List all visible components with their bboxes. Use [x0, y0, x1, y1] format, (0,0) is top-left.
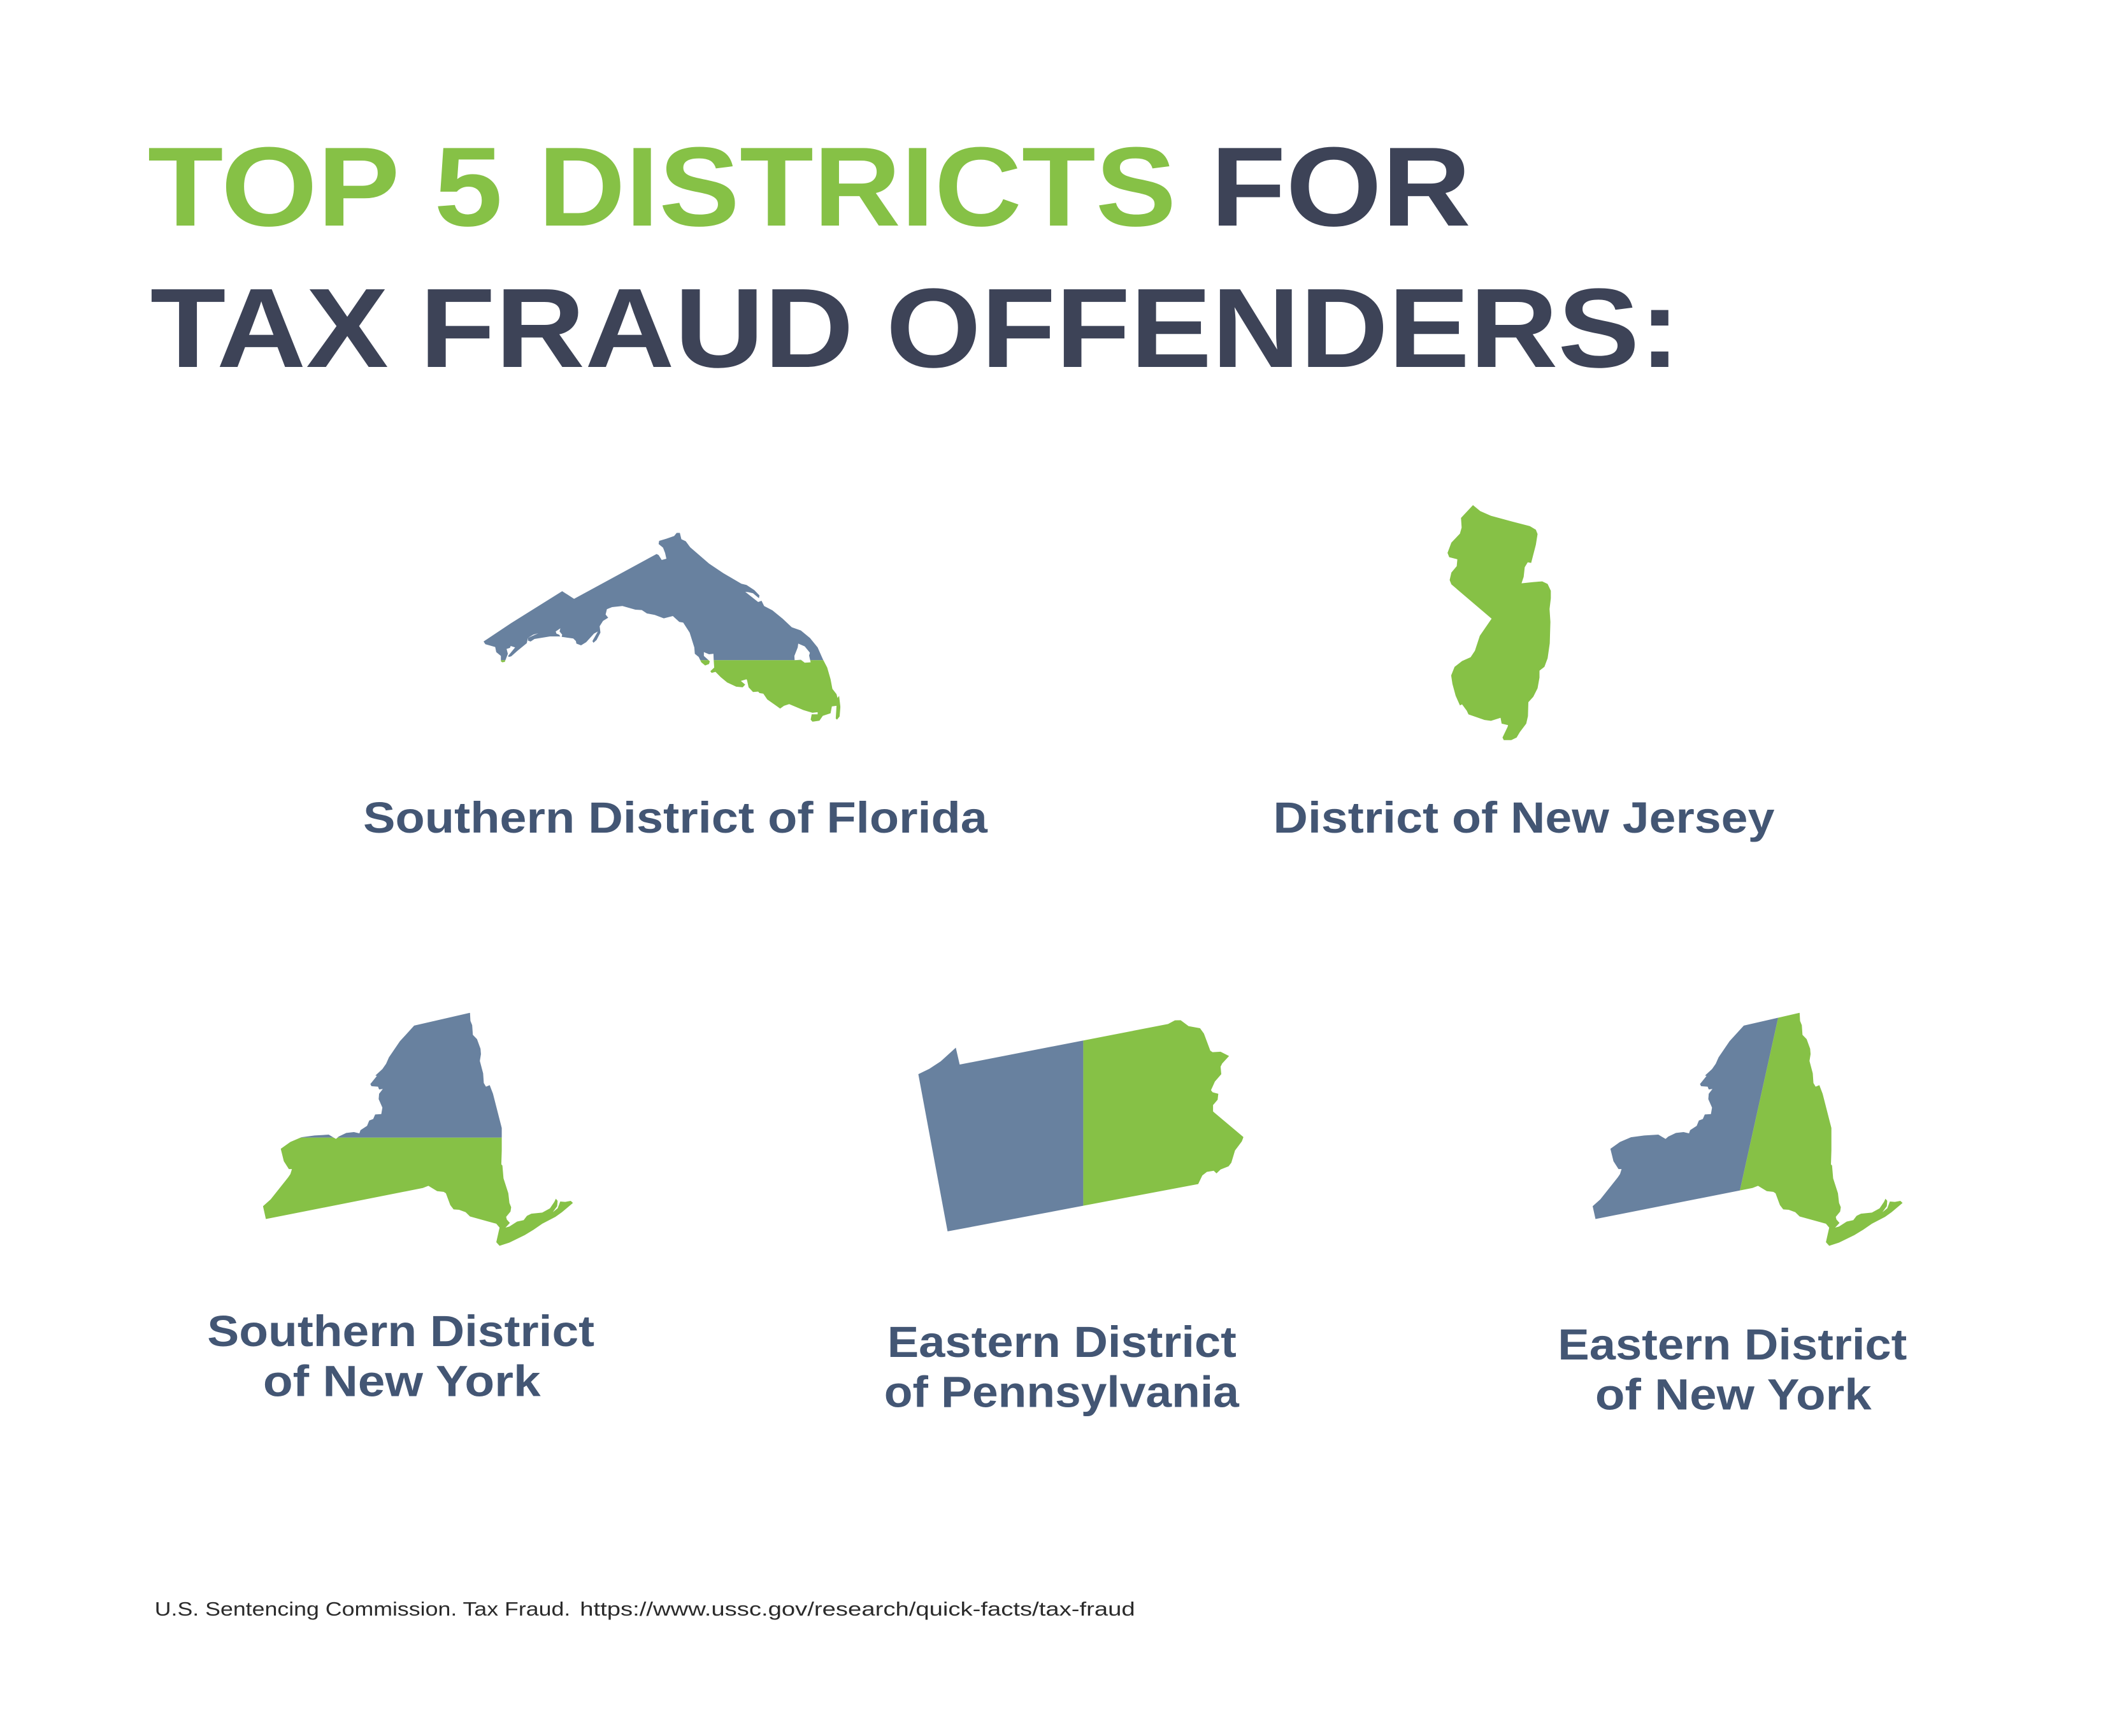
panel: Southern District of Florida	[363, 510, 988, 842]
label: of New York	[1595, 1370, 1872, 1419]
label: of Pennsylvania	[884, 1367, 1240, 1416]
panel: District of New Jersey	[1274, 505, 1774, 842]
panel: Eastern District of New York	[1561, 1013, 1906, 1410]
title line 1: 5	[434, 124, 503, 250]
map: New York, split horizontally	[263, 1013, 573, 1246]
source footnote: U.S. Sentencing Commission. Tax Fraud.	[155, 1598, 570, 1620]
map: Pennsylvania, split vertically	[919, 1020, 1244, 1231]
label: Southern District	[207, 1307, 594, 1356]
source footnote	[155, 1598, 1135, 1620]
label: Eastern District	[1558, 1320, 1907, 1369]
source footnote: https://www.ussc.gov/research/quick-facts/tax-fraud	[580, 1598, 1135, 1620]
label: of New York	[263, 1357, 541, 1406]
map: New Jersey	[1447, 505, 1551, 740]
title line 1: FOR	[1210, 124, 1471, 250]
title	[148, 124, 1680, 391]
panel: Southern District of New York	[207, 1005, 599, 1406]
map: Florida	[484, 533, 841, 722]
title line 2: OFFENDERS:	[886, 265, 1680, 391]
label	[884, 1317, 1240, 1416]
title line 2: FRAUD	[420, 265, 854, 391]
title line 1: TOP	[148, 124, 400, 250]
label	[1558, 1320, 1907, 1419]
label	[207, 1307, 594, 1406]
map: New York, split diagonally	[1593, 1013, 1902, 1246]
label: District of New Jersey	[1274, 793, 1774, 842]
label: Southern District of Florida	[363, 793, 988, 842]
title line 2: TAX	[150, 265, 389, 391]
title line 1	[148, 124, 1471, 250]
panel: Eastern District of Pennsylvania	[884, 1012, 1266, 1416]
label: Eastern District	[887, 1317, 1237, 1367]
title line 2	[150, 265, 1680, 391]
title line 1: DISTRICTS	[538, 124, 1176, 250]
